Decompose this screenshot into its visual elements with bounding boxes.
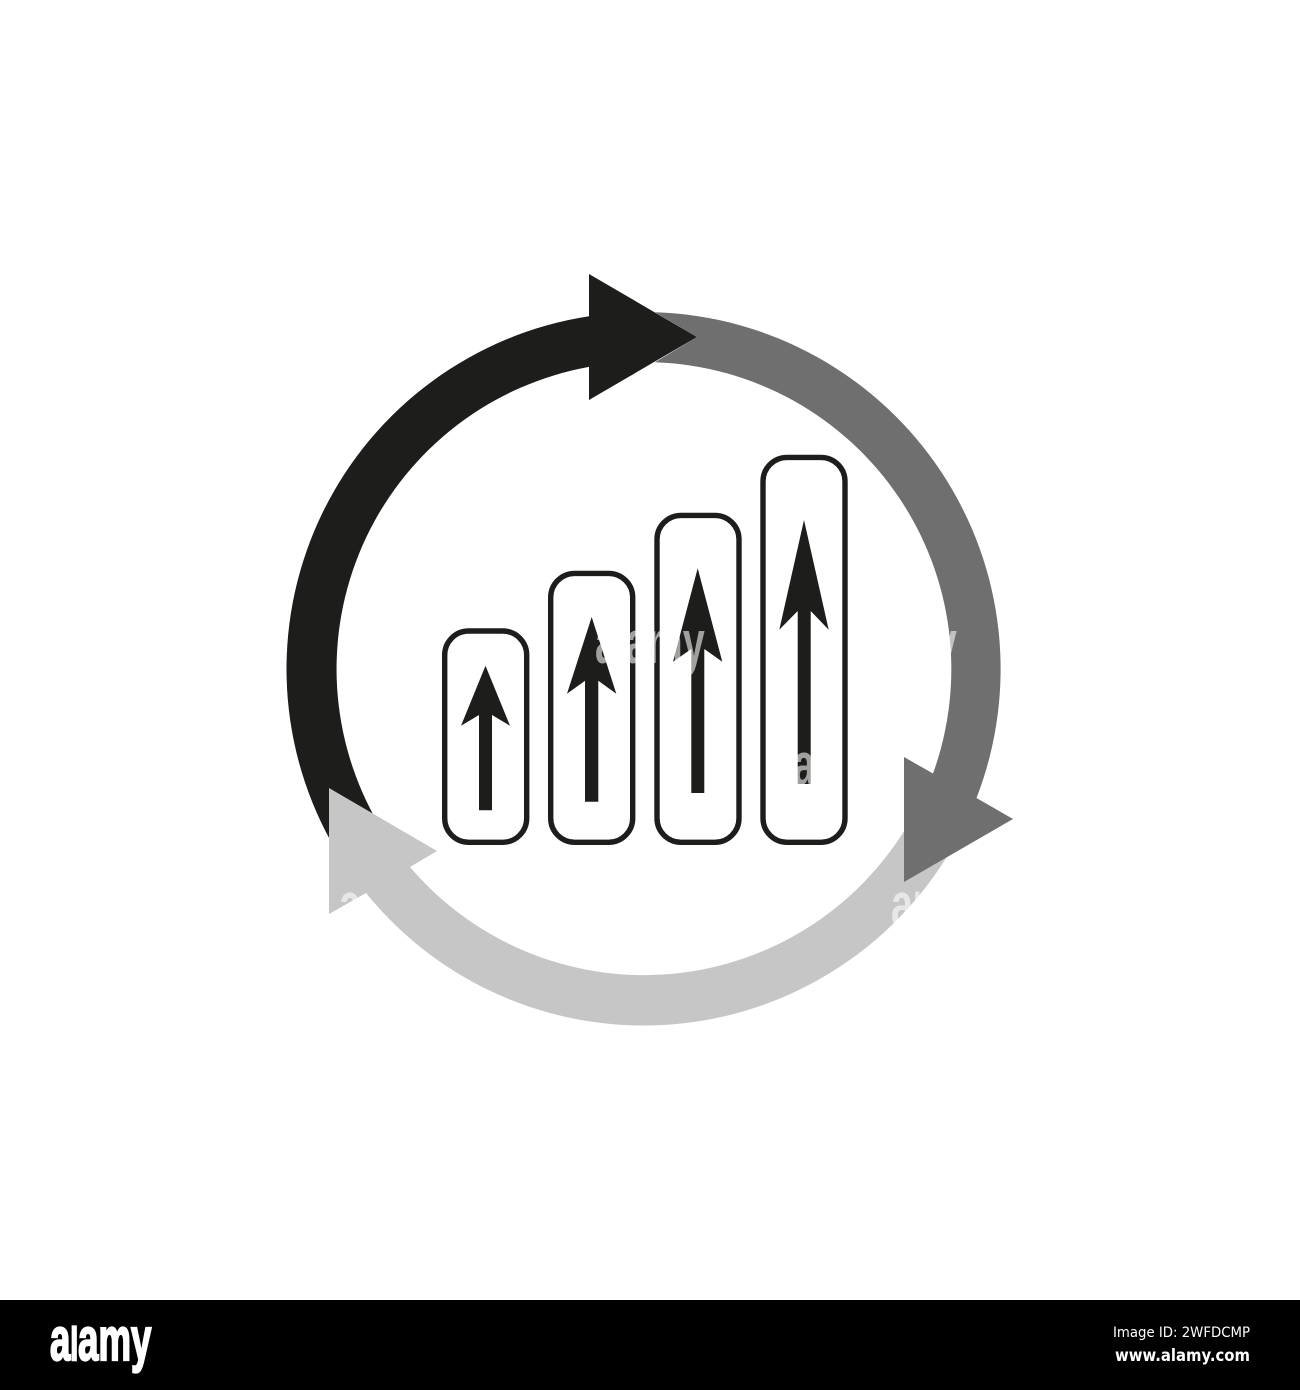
circular cycle of three arrows [287,274,1013,1026]
bar 1 with up arrow [445,631,527,842]
arrow: dark grey arc, right [655,312,1013,882]
website: www.alamy.com [1115,1346,1250,1366]
bar 3 with up arrow [657,515,739,842]
arrow: light grey arc, bottom [329,788,964,1026]
faint watermark fragments [339,609,957,938]
bar 2 with up arrow [551,573,633,842]
image id: Image ID: 2WFDCMP [1113,1325,1250,1341]
faint watermark fragments: al [891,871,921,938]
footer band [0,1300,1300,1390]
faint watermark fragments: alamy [847,609,957,676]
faint watermark fragments: a [339,871,362,938]
faint watermark fragments: a [793,731,816,798]
footer logo: alamy [50,1306,152,1373]
rising bar chart with arrows [445,457,845,842]
arrow: black arc, upper left [287,274,697,842]
bar 4 with up arrow [763,457,845,842]
faint watermark fragments: alamy [595,609,705,676]
